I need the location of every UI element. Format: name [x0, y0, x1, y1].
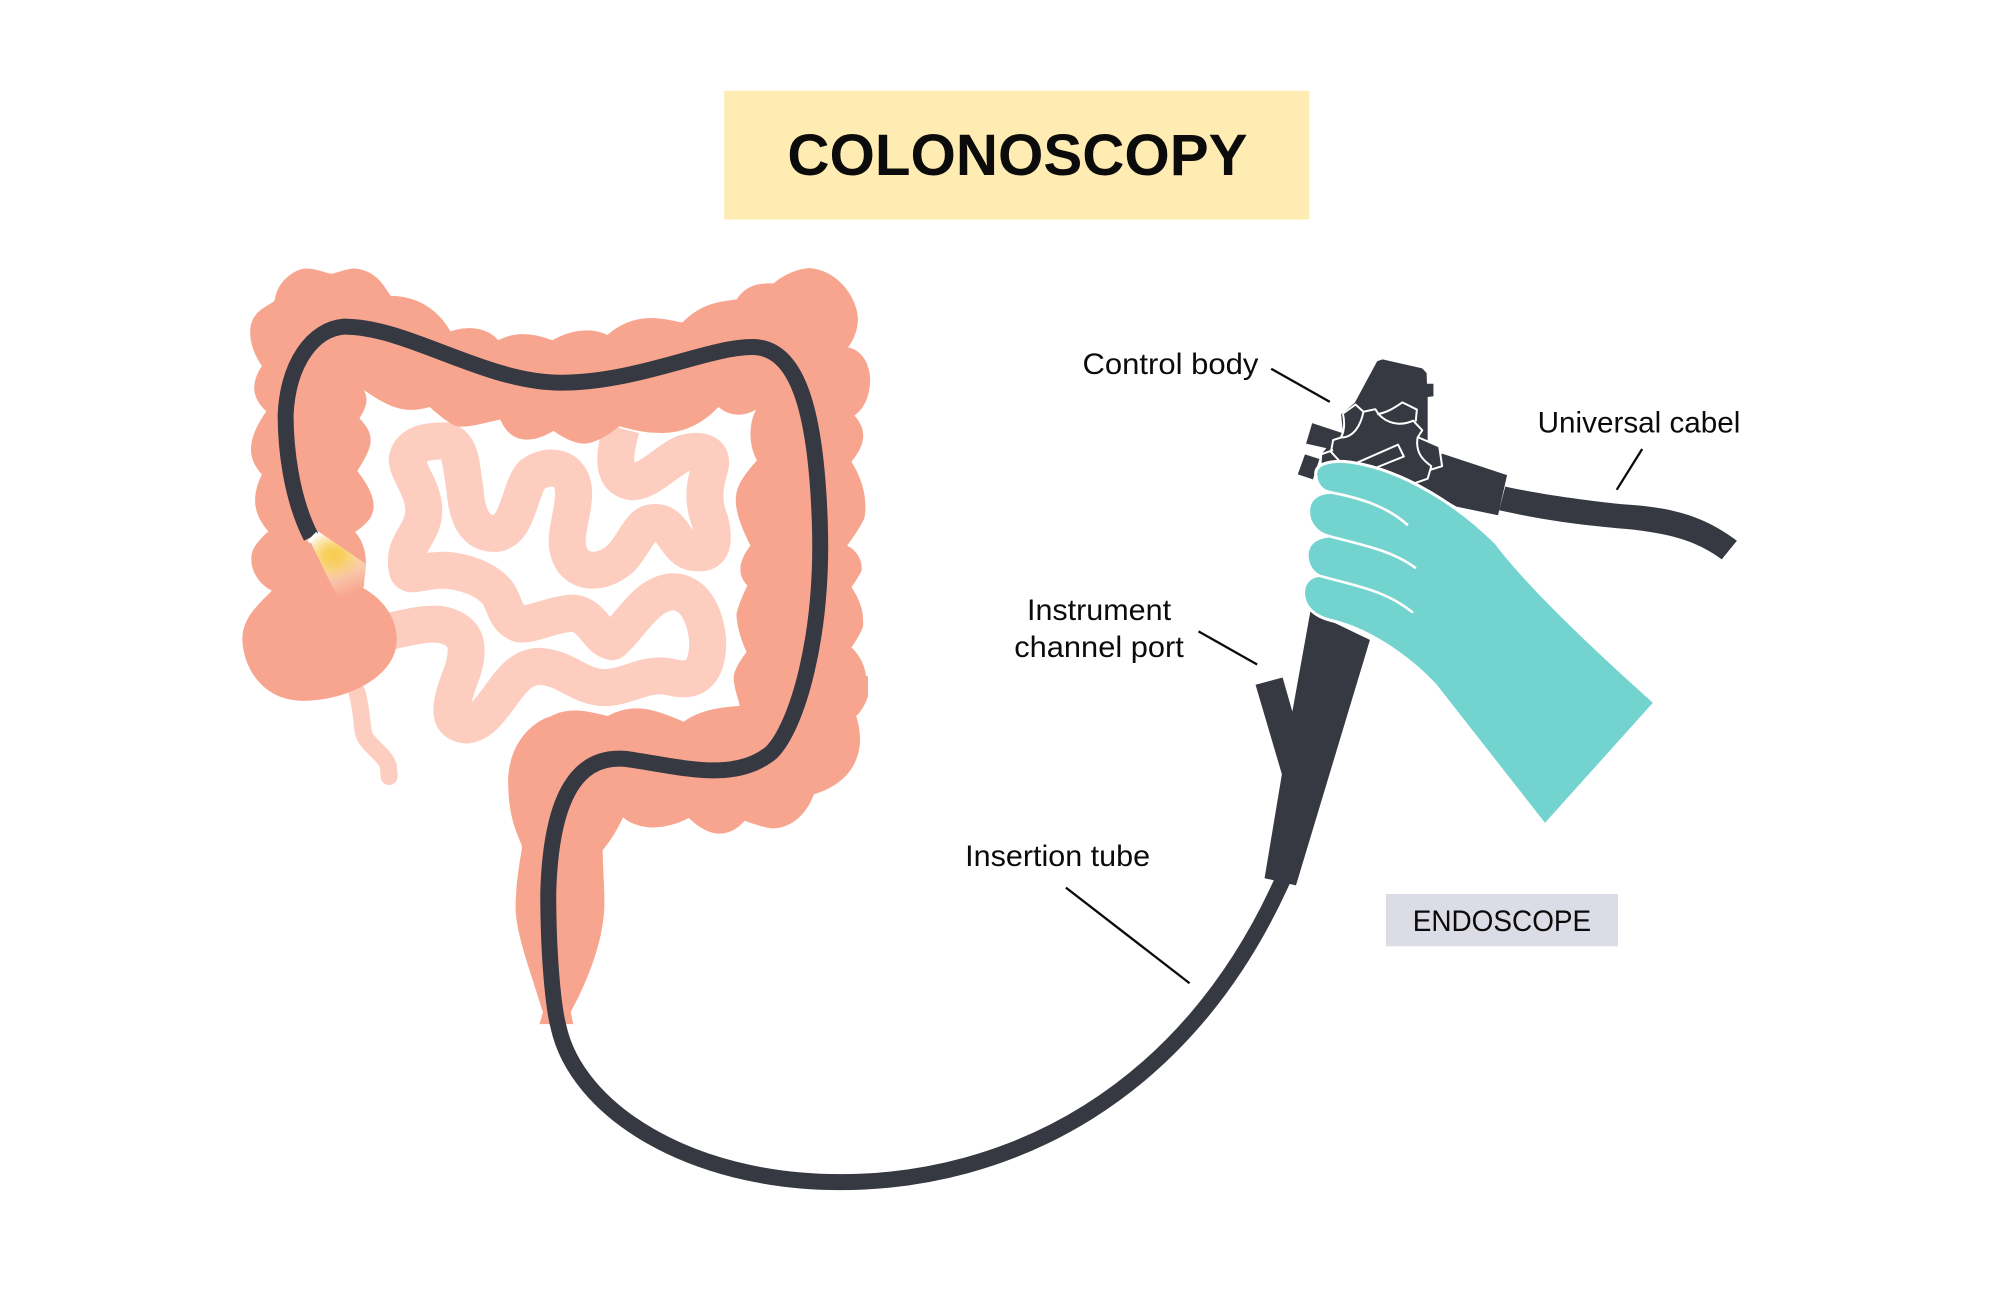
- label: universal cable: [1538, 406, 1740, 490]
- endoscope tag: [1386, 894, 1618, 946]
- colon lower section and rectum: [508, 676, 868, 1024]
- label: insertion tube: [965, 840, 1190, 983]
- control knobs: [1321, 402, 1442, 484]
- title banner: [724, 91, 1309, 220]
- instrument shaft and port: [1256, 611, 1370, 885]
- large intestine illustration: [242, 268, 870, 1024]
- finger creases: [1319, 492, 1415, 612]
- appendix: [357, 691, 389, 777]
- label: instrument channel port: channel port: [1014, 631, 1184, 664]
- gloved hand: [1304, 461, 1655, 825]
- endoscope tip: [307, 532, 319, 543]
- title banner: COLONOSCOPY: [787, 123, 1248, 188]
- universal cable: [1499, 487, 1737, 559]
- endoscope light beam: [310, 531, 366, 598]
- label: instrument channel port: [1014, 594, 1257, 664]
- label: universal cable: Universal cabel: [1538, 406, 1740, 439]
- control head: [1341, 359, 1435, 482]
- endoscope tag: ENDOSCOPE: [1413, 905, 1591, 938]
- label: insertion tube: Insertion tube: [965, 840, 1150, 873]
- endoscope handle: [1256, 359, 1737, 885]
- eyepiece blocks: [1306, 423, 1342, 450]
- small intestine: [357, 428, 712, 777]
- label: control body: Control body: [1082, 348, 1259, 381]
- cable connector: [1413, 454, 1507, 515]
- endoscope insertion tube: [286, 327, 1293, 1182]
- label: control body: [1082, 348, 1330, 402]
- colon upper section: [242, 268, 870, 738]
- label: instrument channel port: Instrument: [1027, 594, 1171, 627]
